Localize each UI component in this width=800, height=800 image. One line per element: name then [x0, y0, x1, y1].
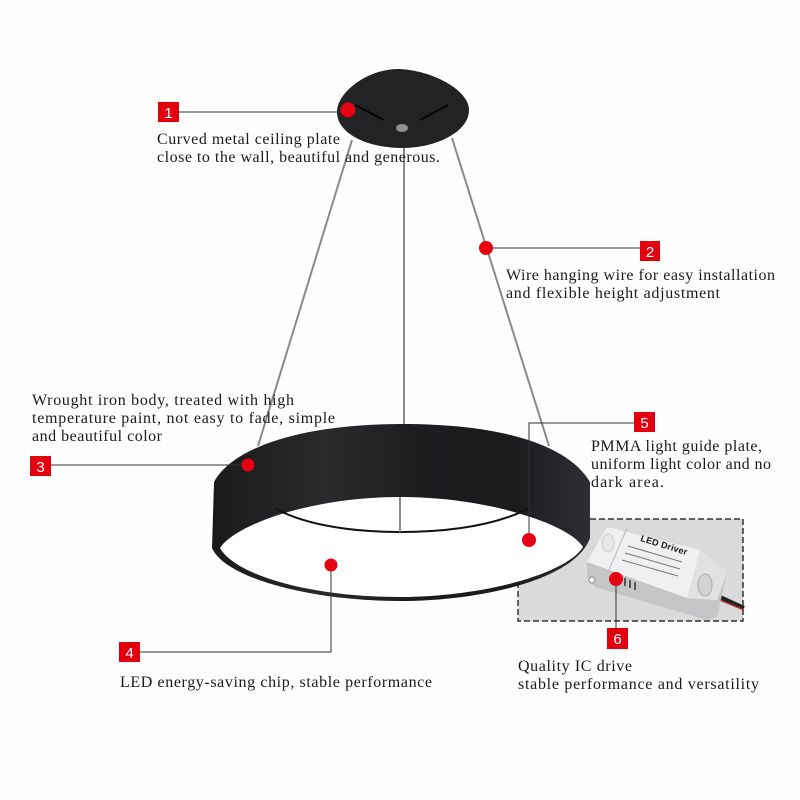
callout 1: ceiling plate: close to the wall, beautiful and generous. [157, 149, 440, 166]
icon: LED driver box [587, 527, 744, 620]
callout 6: IC drive: Quality IC drive [518, 658, 632, 675]
callout 6: IC drive: stable performance and versatility [518, 676, 759, 693]
callout 6: IC drive: 6 [613, 631, 622, 648]
callout 6: IC drive [518, 572, 759, 693]
callout 1: ceiling plate [157, 102, 440, 166]
callout 5: light guide plate: 5 [640, 415, 649, 432]
callout 5: light guide plate: dark area. [591, 474, 664, 491]
callout 3: iron body: temperature paint, not easy to fade, simple [32, 410, 335, 427]
callout 4: LED chip [119, 558, 432, 691]
callout 2: hanging wire [479, 241, 775, 302]
callout 3: iron body: and beautiful color [32, 428, 163, 445]
callout 2: hanging wire: Wire hanging wire for easy installation [506, 267, 775, 284]
callout 5: light guide plate: uniform light color and no [591, 456, 771, 473]
callout 1: ceiling plate: Curved metal ceiling plate [157, 131, 340, 148]
panel: LED driver inset [518, 519, 744, 621]
callout 5: light guide plate [522, 412, 771, 547]
callout 4: LED chip: LED energy-saving chip, stable performance [120, 674, 432, 691]
callout 1: ceiling plate: 1 [164, 105, 173, 122]
callout 2: hanging wire: 2 [646, 244, 654, 261]
callout 3: iron body: Wrought iron body, treated with high [32, 392, 294, 409]
callout 4: LED chip: 4 [125, 645, 134, 662]
icon: suspension wires [258, 138, 549, 446]
callout 3: iron body [30, 392, 335, 476]
callout 2: hanging wire: and flexible height adjustment [506, 285, 721, 302]
icon: ring lamp [212, 424, 590, 601]
icon: ceiling plate [337, 69, 469, 148]
callout 3: iron body: 3 [36, 459, 45, 476]
callout 5: light guide plate: PMMA light guide plate, [591, 438, 762, 455]
icon: LED driver box: LED Driver [639, 533, 689, 557]
